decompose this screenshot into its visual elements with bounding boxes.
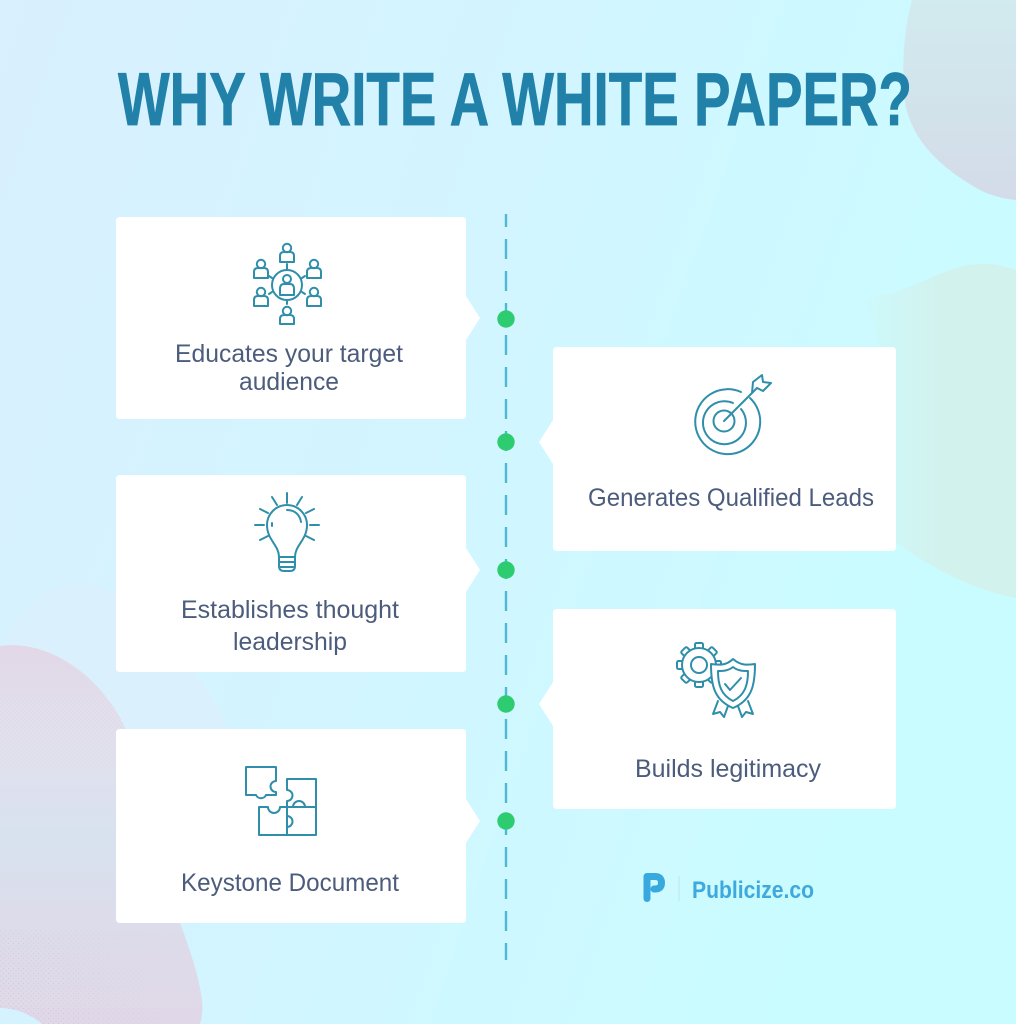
logo divider <box>678 876 680 901</box>
logo mark <box>647 876 662 898</box>
blob: right mint <box>866 264 1016 598</box>
icon: people network <box>254 244 321 324</box>
card 4: legitimacy <box>539 609 896 809</box>
card 3: thought leadership <box>116 475 480 672</box>
blob texture: dark dots <box>0 930 131 1024</box>
blob: left pale blue <box>0 584 240 800</box>
label: Keystone Document <box>181 869 399 897</box>
card 2: leads <box>539 347 896 551</box>
logo <box>647 876 814 904</box>
icon: gear and shield <box>677 643 755 717</box>
label line 2: leadership <box>233 628 347 656</box>
blob texture: light dots <box>0 695 125 746</box>
card 5: keystone <box>116 729 480 923</box>
icon: target with arrow <box>695 375 771 454</box>
logo wordmark: Publicize.co <box>692 877 814 904</box>
card 1: educates <box>116 217 480 419</box>
label: Generates Qualified Leads <box>588 484 874 512</box>
label: Establishes thought <box>181 596 399 624</box>
icon: light bulb <box>255 493 319 571</box>
dashed timeline <box>505 214 507 960</box>
label: Educates your target <box>175 340 403 368</box>
blob: top right grey-pink <box>903 0 1016 200</box>
label line 2: audience <box>239 368 339 396</box>
label: Builds legitimacy <box>635 755 821 783</box>
timeline dots <box>497 310 515 830</box>
icon: puzzle pieces <box>246 767 316 835</box>
blob: bottom left pink <box>0 645 202 1024</box>
